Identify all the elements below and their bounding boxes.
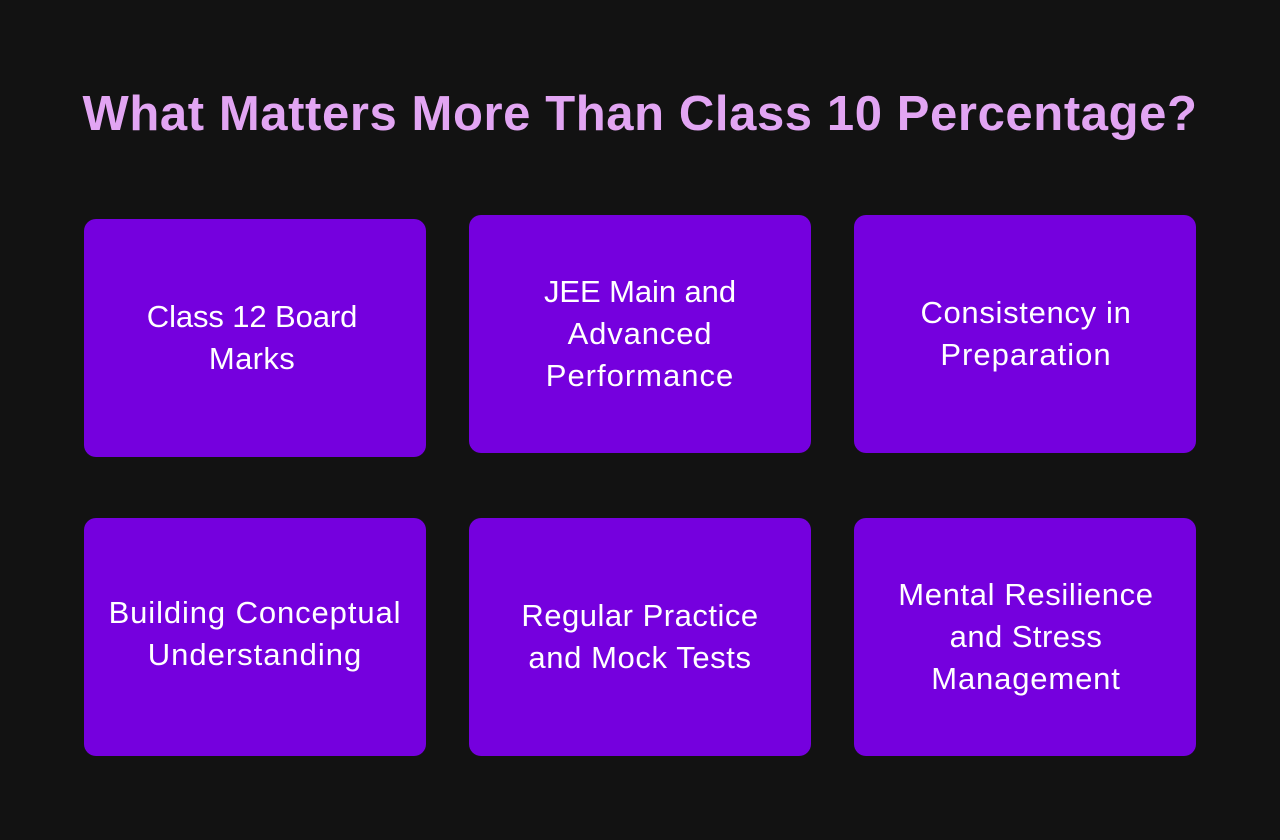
card: JEE Main and Advanced Performance bbox=[469, 215, 811, 453]
card: Regular Practice and Mock Tests: and Mock Tests bbox=[528, 640, 752, 675]
card: Mental Resilience and Stress Management: Management bbox=[931, 661, 1121, 696]
card: Regular Practice and Mock Tests bbox=[469, 518, 811, 756]
card: Mental Resilience and Stress Management: and Stress bbox=[950, 619, 1102, 654]
card: Mental Resilience and Stress Management: Mental Resilience bbox=[898, 577, 1154, 612]
card: JEE Main and Advanced Performance: Performance bbox=[546, 358, 734, 393]
card: Regular Practice and Mock Tests: Regular Practice bbox=[521, 598, 759, 633]
title: What Matters More Than Class 10 Percentage? bbox=[82, 87, 1198, 141]
card: Consistency in Preparation bbox=[854, 215, 1196, 453]
card: Building Conceptual Understanding bbox=[84, 518, 426, 756]
card: Building Conceptual Understanding: Building Conceptual bbox=[109, 595, 401, 630]
card: Class 12 Board Marks bbox=[84, 219, 426, 457]
card: Consistency in Preparation: Consistency in bbox=[920, 295, 1132, 330]
card: JEE Main and Advanced Performance: Advanced bbox=[568, 316, 712, 351]
card: Class 12 Board Marks: Marks bbox=[209, 341, 295, 376]
card: Mental Resilience and Stress Management bbox=[854, 518, 1196, 756]
card: JEE Main and Advanced Performance: JEE Main and bbox=[544, 274, 736, 309]
card: Class 12 Board Marks: Class 12 Board bbox=[147, 299, 357, 334]
card: Consistency in Preparation: Preparation bbox=[940, 337, 1112, 372]
card: Building Conceptual Understanding: Understanding bbox=[148, 637, 362, 672]
